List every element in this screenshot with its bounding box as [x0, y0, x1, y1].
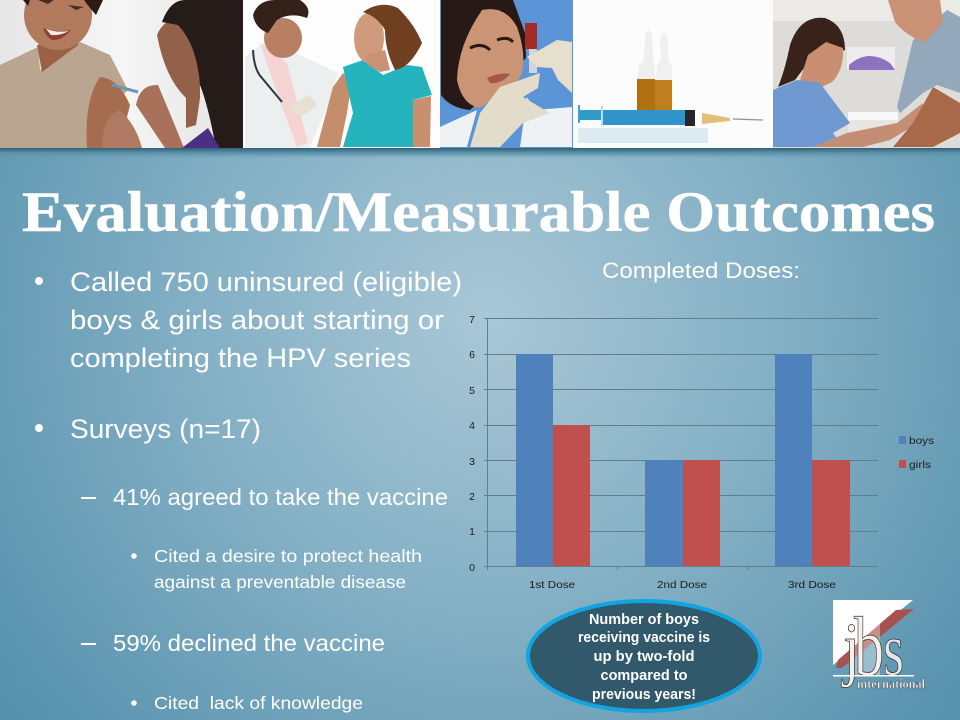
shadow band below photos [0, 148, 960, 158]
y axis labels: 7 [469, 314, 475, 326]
bars: girls [553, 425, 850, 566]
logo: jbs international: s [883, 608, 904, 692]
photo: lab technician holding a syringe [440, 0, 573, 148]
legend: girls [909, 459, 931, 471]
logo: jbs international: j [840, 608, 860, 688]
y axis labels: 3 [469, 456, 475, 468]
detail: desire to protect [131, 546, 422, 592]
chart heading: Completed Doses: [602, 258, 800, 283]
title: Evaluation/Measurable Outcomes [22, 181, 935, 244]
photo: vials and blue syringe [573, 0, 773, 148]
detail: desire to protect: Cited a desire to protect health [154, 546, 422, 566]
y axis labels: 0 [469, 562, 475, 574]
callout: boys two-fold: compared to [600, 668, 688, 684]
photo: patient receiving a shot from a nurse [0, 0, 243, 148]
photo: nurse vaccinating older man [773, 0, 960, 148]
logo: jbs international [833, 600, 925, 694]
logo: jbs international: international [857, 676, 925, 691]
legend [899, 435, 934, 471]
detail: desire to protect: against a preventable disease [154, 572, 406, 592]
callout: boys two-fold: receiving vaccine is [578, 630, 710, 646]
y axis labels: 5 [469, 385, 475, 397]
logo: jbs international: b [854, 600, 884, 694]
bullet: called 750 [35, 267, 462, 373]
callout: boys two-fold [528, 601, 760, 711]
callout: boys two-fold: up by two-fold [594, 649, 694, 665]
sub-bullet: 41% agreed: 41% agreed to take the vaccine [113, 484, 448, 510]
photo strip [0, 0, 960, 148]
bullet: called 750: Called 750 uninsured (eligible) [70, 267, 462, 297]
bullet: called 750: completing the HPV series [70, 343, 411, 373]
bars: boys [516, 354, 812, 566]
bullet: called 750: boys & girls about starting or [70, 305, 444, 335]
detail: lack of knowledge: Cited lack of knowledge [154, 693, 363, 713]
y axis labels: 1 [469, 526, 475, 538]
bullet: surveys: Surveys (n=17) [70, 414, 261, 444]
y axis labels [469, 314, 475, 574]
gridlines [484, 318, 878, 570]
bar chart: completed doses [469, 314, 934, 591]
callout: boys two-fold: Number of boys [589, 612, 699, 628]
x axis labels: 2nd Dose [657, 579, 707, 591]
callout: boys two-fold: previous years! [592, 687, 696, 703]
x axis labels [529, 579, 836, 591]
legend: boys [909, 435, 934, 447]
y axis labels: 2 [469, 491, 475, 503]
photo: doctor with girl in teal shirt [243, 0, 440, 148]
x axis labels: 3rd Dose [788, 579, 836, 591]
sub-bullet: 59% declined: 59% declined the vaccine [113, 630, 385, 656]
y axis labels: 6 [469, 349, 475, 361]
x axis labels: 1st Dose [529, 579, 575, 591]
y axis labels: 4 [469, 420, 475, 432]
bullet list [35, 267, 462, 713]
